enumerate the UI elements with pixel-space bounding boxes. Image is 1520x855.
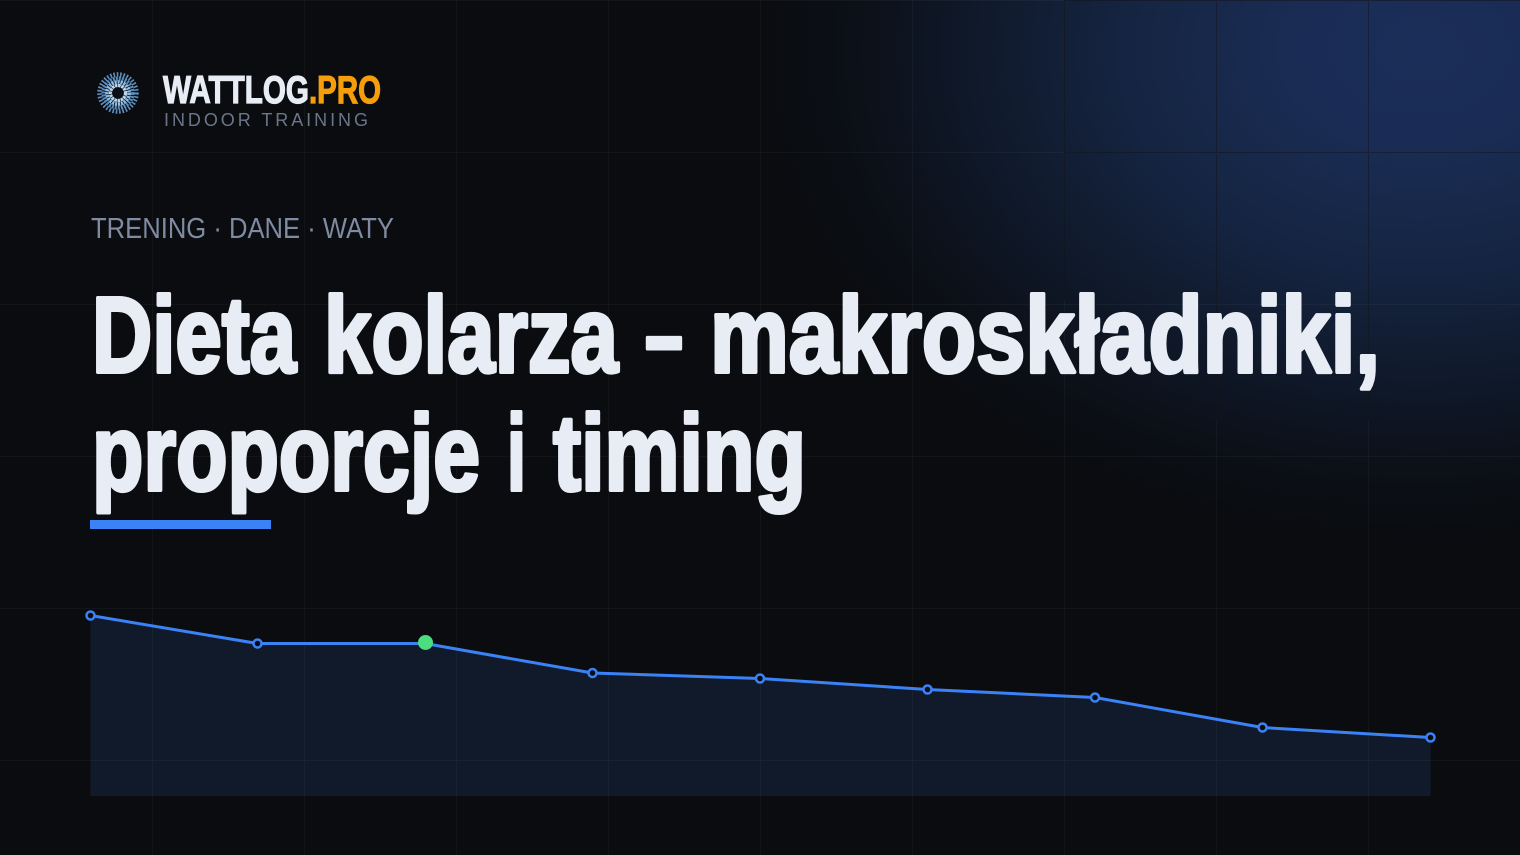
chart area xyxy=(90,616,1430,796)
title: makroskładniki, xyxy=(710,274,1380,395)
icon: cassette gear xyxy=(100,74,136,112)
title: – xyxy=(645,274,683,395)
tagline: INDOOR TRAINING xyxy=(164,110,368,130)
title underline xyxy=(90,520,271,529)
title: kolarza xyxy=(324,274,619,395)
title xyxy=(92,274,1380,513)
chart grid overlay xyxy=(90,620,1431,796)
logo xyxy=(100,69,381,130)
wordmark: WATTLOG xyxy=(163,69,309,112)
chart line xyxy=(90,616,1430,738)
title: timing xyxy=(553,392,806,513)
highlighted point xyxy=(418,635,433,650)
eyebrow: TRENING · DANE · WATY xyxy=(91,213,394,245)
title: i xyxy=(507,392,526,513)
title: proporcje xyxy=(92,392,480,513)
wordmark: .PRO xyxy=(309,69,381,112)
data points xyxy=(86,612,1434,742)
line chart xyxy=(86,612,1434,796)
title: Dieta xyxy=(92,274,297,395)
